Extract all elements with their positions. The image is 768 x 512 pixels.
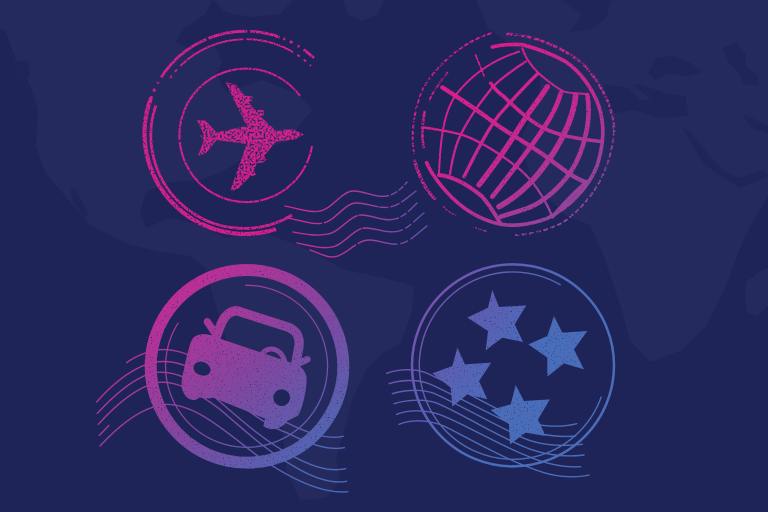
stamp: globe — [413, 33, 614, 235]
postmark waves behind car — [97, 350, 348, 492]
outer ring, heavy lower-left arc — [145, 98, 276, 234]
stamp: stars — [387, 264, 614, 477]
globe grid and outline — [422, 44, 603, 225]
postmark waves — [285, 182, 427, 257]
second ring upper arc — [170, 39, 311, 78]
second ring lower-left arc — [151, 105, 292, 228]
thin inner arc — [166, 285, 328, 447]
car details: headlights — [192, 359, 290, 406]
stamp: car — [97, 270, 348, 492]
plane silhouette — [197, 82, 304, 192]
car silhouette — [182, 311, 307, 429]
outer heavy ring — [151, 270, 343, 463]
outer ring, broken upper arc — [151, 31, 314, 98]
meridians — [439, 52, 519, 173]
sphere outline — [427, 44, 603, 225]
heavy ring and car — [151, 270, 343, 463]
parallels — [522, 48, 588, 94]
map: inland seas and dark details — [12, 0, 768, 218]
plane rings — [145, 31, 314, 234]
lower cap of the globe — [439, 175, 501, 224]
stamp: airplane — [145, 31, 427, 257]
four stars — [432, 290, 587, 444]
star postmark waves — [387, 370, 589, 477]
inner ring — [179, 69, 312, 202]
star rings — [412, 264, 614, 466]
dotted outer ring — [413, 33, 614, 235]
